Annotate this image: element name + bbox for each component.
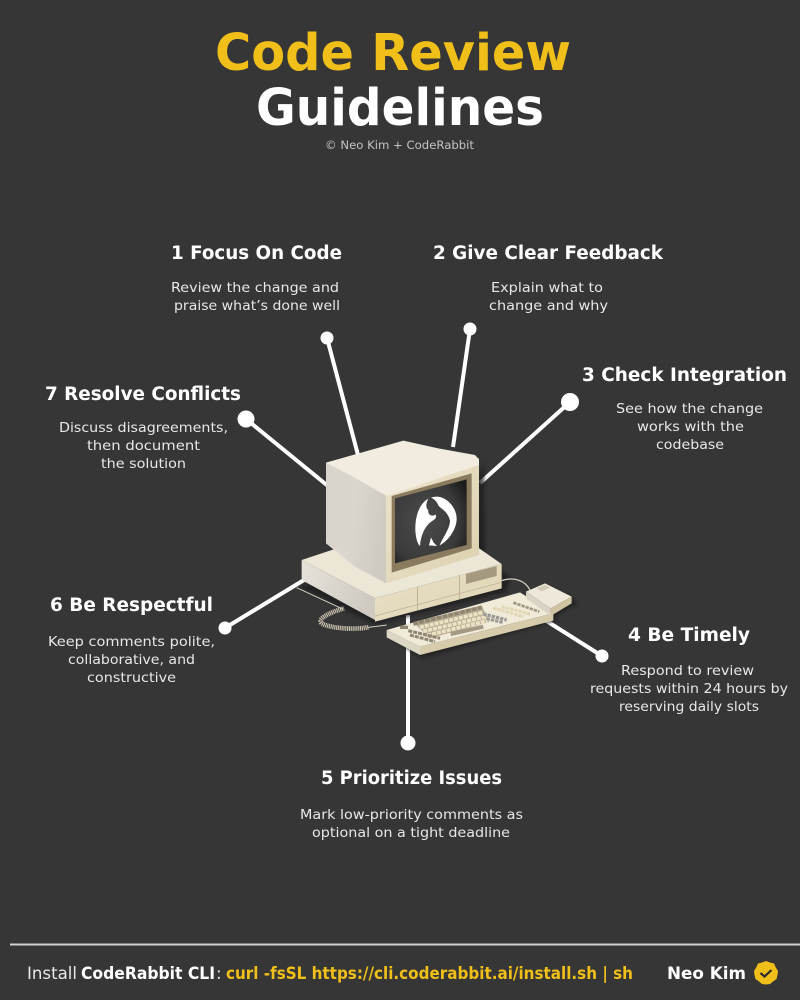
description (171, 280, 340, 314)
heading: 2 Give Clear Feedback (433, 243, 664, 264)
description (59, 420, 228, 472)
monitor (326, 441, 479, 583)
keyboard (387, 592, 553, 655)
computer base unit (302, 547, 502, 622)
guideline 6: Be Respectful (48, 595, 215, 686)
description (48, 634, 215, 686)
connector 4 (545, 620, 608, 662)
connector lines with end dots (218, 322, 608, 750)
description (489, 280, 608, 314)
install command (27, 964, 633, 984)
guideline 7: Resolve Conflicts (45, 384, 241, 472)
connector 7 (238, 410, 328, 486)
install command: curl -fsSL https://cli.coderabbit.ai/install.sh | sh (226, 964, 633, 984)
phone-style coiled cable (297, 579, 530, 629)
heading: 1 Focus On Code (171, 243, 342, 264)
guideline 4: Be Timely (590, 625, 788, 715)
heading: 5 Prioritize Issues (321, 768, 502, 789)
description: the solution (101, 456, 186, 472)
icon: verified badge (754, 961, 778, 984)
description: change and why (489, 298, 608, 314)
connector 1 (320, 332, 358, 455)
author name: Neo Kim (667, 964, 746, 983)
keyboard keys (400, 603, 539, 642)
guideline 2: Give Clear Feedback (433, 243, 664, 314)
description: then document (87, 438, 200, 454)
title: Code Review: Code Review (215, 24, 571, 83)
description: codebase (656, 437, 724, 453)
title: Guidelines: Guidelines (256, 79, 544, 138)
heading: 6 Be Respectful (50, 595, 213, 616)
connector 5 (400, 615, 416, 750)
connector 6 (218, 580, 304, 634)
guideline 5: Prioritize Issues (300, 768, 523, 841)
description: Explain what to (491, 280, 603, 296)
description: Respond to review (621, 663, 754, 679)
copyright line: © Neo Kim + CodeRabbit (325, 138, 474, 152)
description: Discuss disagreements, (59, 420, 228, 436)
logo on screen (415, 497, 457, 546)
description (616, 401, 763, 453)
connector 2 (453, 322, 476, 447)
description: Keep comments polite, (48, 634, 215, 650)
heading: 7 Resolve Conflicts (45, 384, 241, 405)
description: See how the change (616, 401, 763, 417)
heading: 3 Check Integration (582, 365, 787, 386)
description: optional on a tight deadline (312, 825, 510, 841)
description: Review the change and (171, 280, 339, 296)
guideline 1: Focus On Code (171, 243, 342, 314)
description: Mark low-priority comments as (300, 807, 523, 823)
install command: CodeRabbit CLI (81, 964, 215, 983)
guideline 3: Check Integration (582, 365, 787, 453)
title block (215, 24, 571, 152)
description (300, 807, 523, 841)
description: constructive (87, 670, 176, 686)
install command: Install (27, 964, 77, 983)
description: collaborative, and (68, 652, 195, 668)
description: reserving daily slots (619, 699, 759, 715)
mouse (526, 583, 572, 616)
footer divider (10, 944, 800, 946)
description (590, 663, 788, 715)
drop shadows (300, 463, 577, 658)
heading: 4 Be Timely (628, 625, 750, 646)
monitor screen (392, 473, 472, 573)
connector 3 (480, 393, 579, 483)
description: works with the (637, 419, 744, 435)
icon: retro computer (297, 441, 577, 658)
footer (27, 961, 778, 984)
install command: : (216, 964, 222, 983)
description: requests within 24 hours by (590, 681, 788, 697)
description: praise what’s done well (174, 298, 340, 314)
